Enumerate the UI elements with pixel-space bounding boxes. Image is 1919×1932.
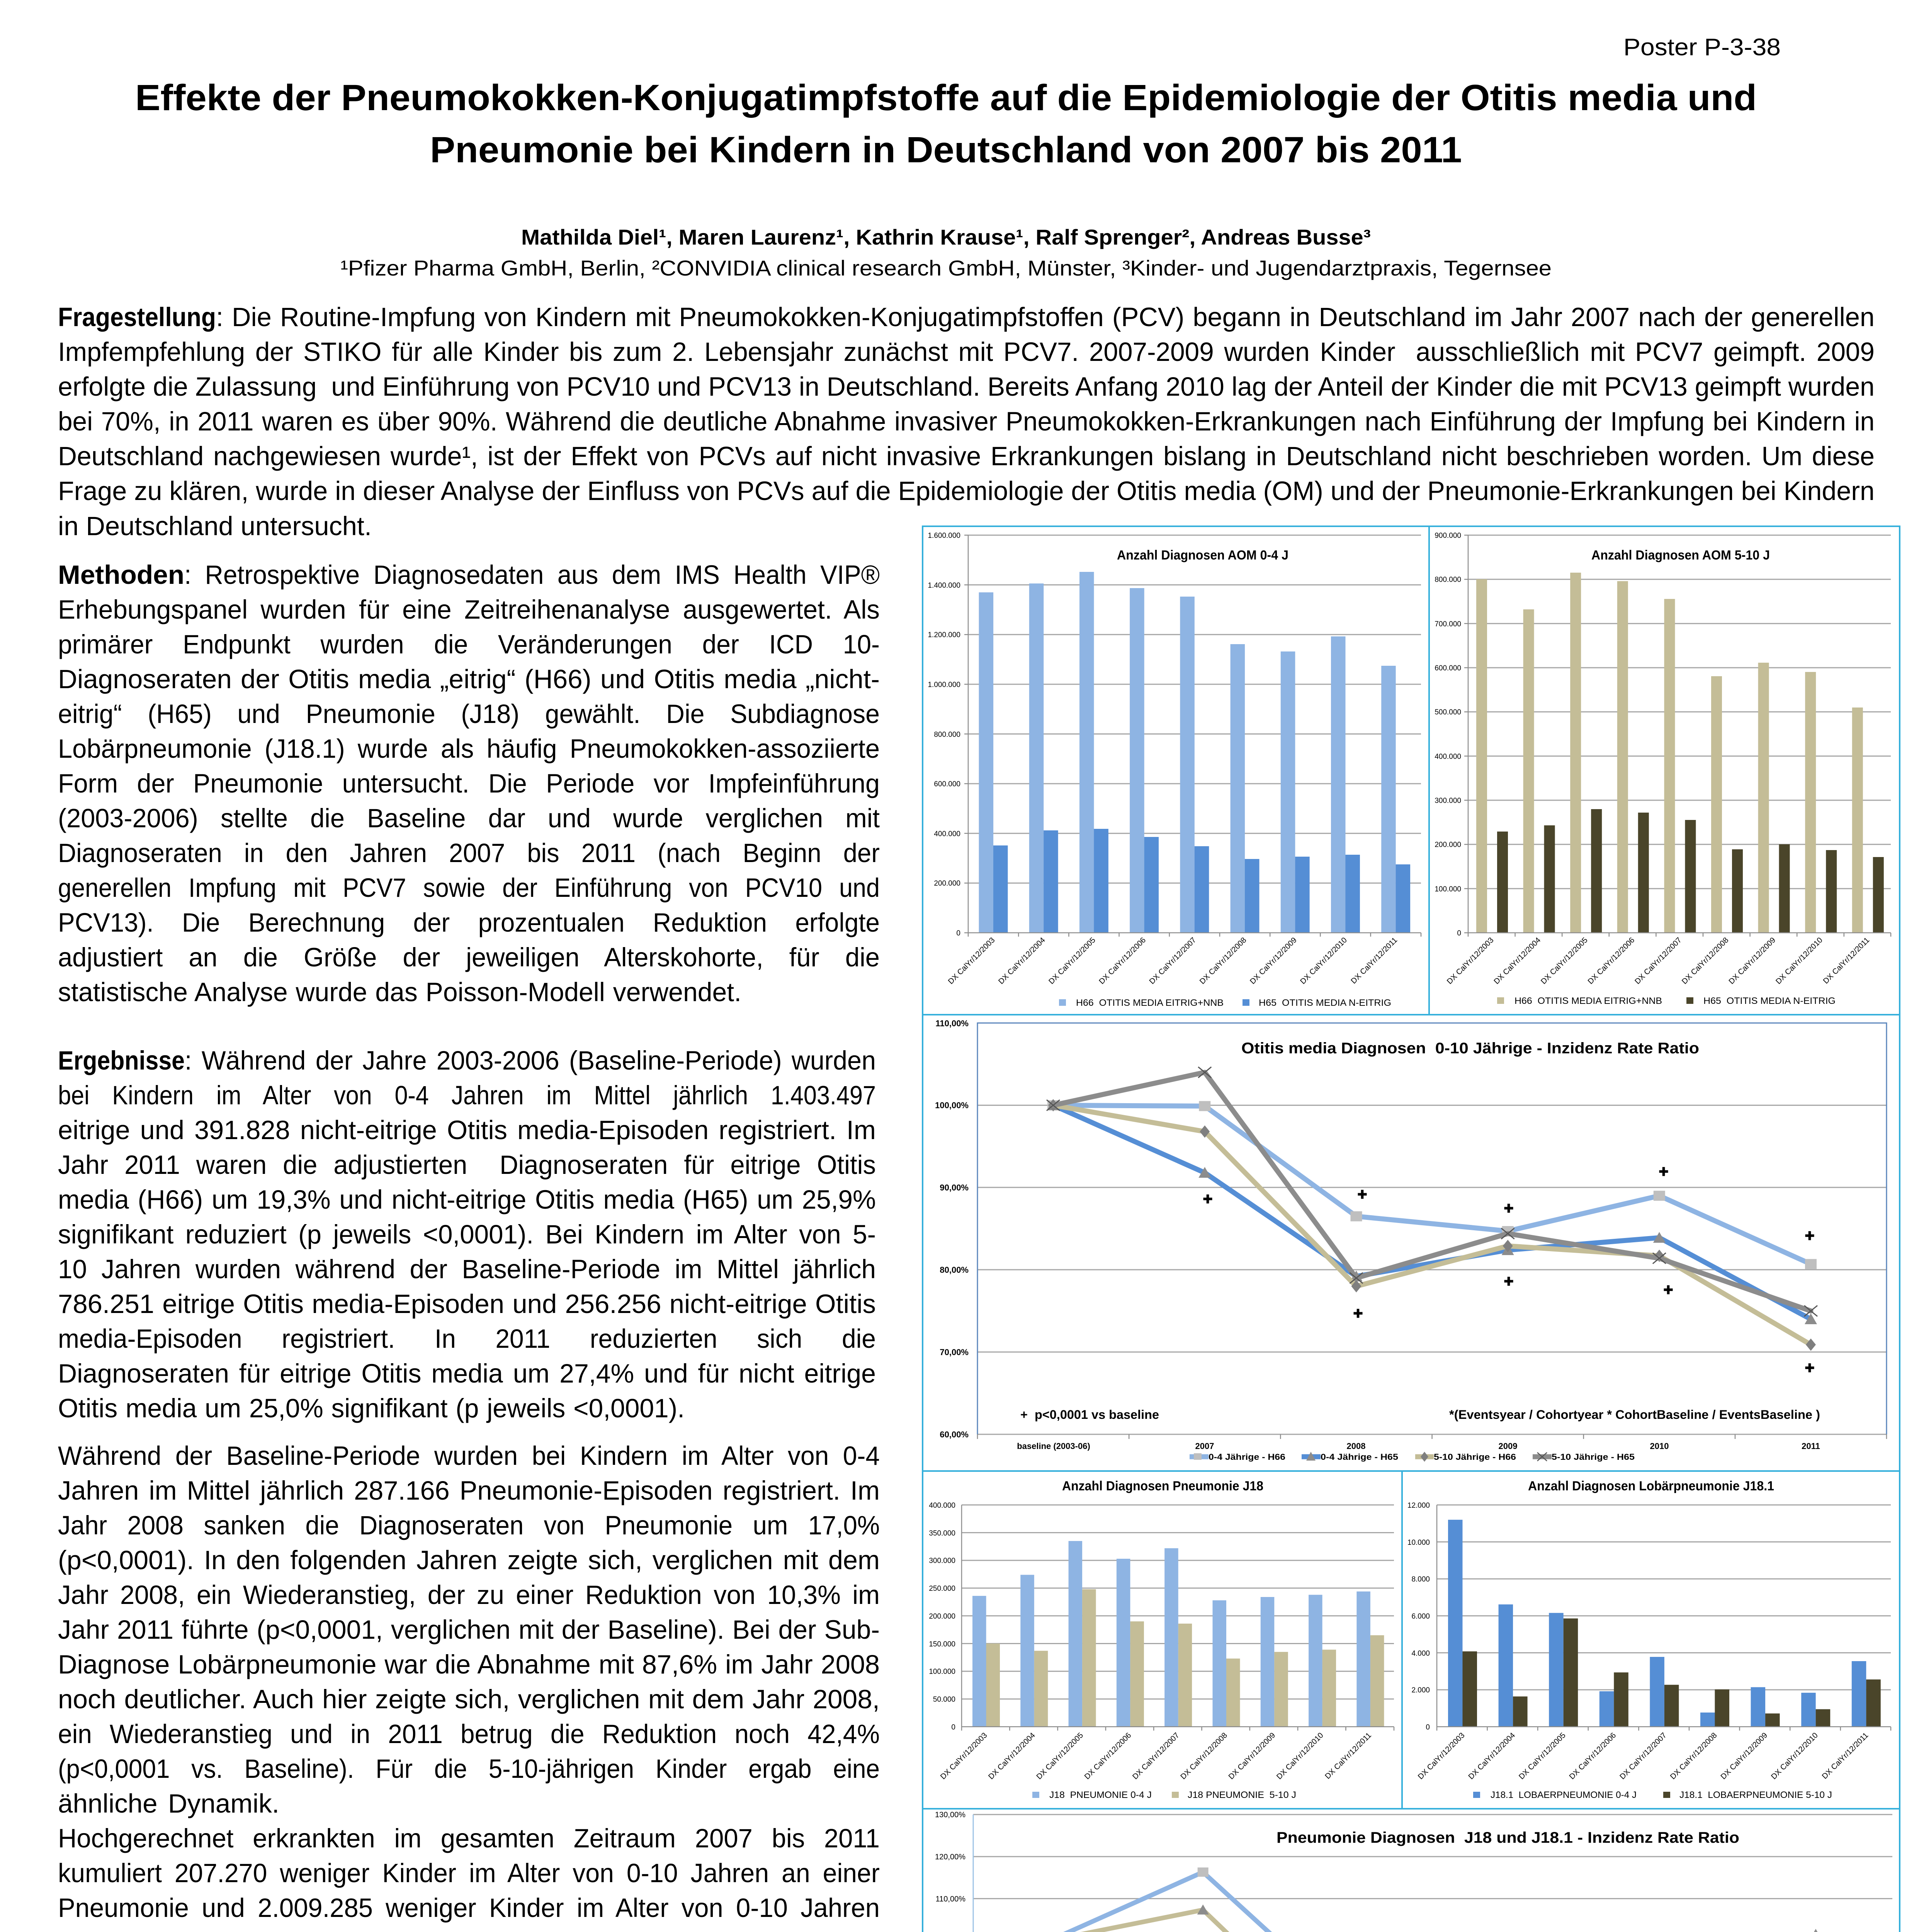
legend: J18.1 LOBAERPNEUMONIE 5-10 J <box>1679 1790 1832 1800</box>
x axis labels: DX CalYr/12/2009 <box>1227 1731 1277 1781</box>
text block: Ergebnisse Otitis media: media (H66) um 19,3% und nicht-eitrige Otitis media (H65) um 25,9% <box>58 1185 876 1214</box>
y axis labels: 110,00% <box>935 1019 969 1028</box>
x axis labels: DX CalYr/12/2007 <box>1131 1731 1181 1781</box>
x axis labels: DX CalYr/12/2008 <box>1179 1731 1229 1781</box>
x axis labels: DX CalYr/12/2008 <box>1680 936 1730 986</box>
affiliations: ¹Pfizer Pharma GmbH, Berlin, ²CONVIDIA clinical research GmbH, Münster, ³Kinder- und Jugendarztpraxis, Tegernsee <box>340 256 1552 280</box>
y axis labels: 700.000 <box>1435 620 1461 628</box>
line: 5-10 Jährige J18 <box>1050 1905 1822 1932</box>
text block: Methoden: Methoden <box>58 560 184 590</box>
y axis labels <box>1435 532 1461 937</box>
significance markers: + <box>1358 1185 1367 1203</box>
text block: Methoden: PCV13). Die Berechnung der prozentualen Reduktion erfolgte <box>58 908 880 937</box>
legend: H65 OTITIS MEDIA N-EITRIG <box>1703 996 1836 1006</box>
y axis labels: 400.000 <box>1435 753 1461 761</box>
x axis labels: baseline (2003-06) <box>1017 1441 1090 1451</box>
text block: Ergebnisse Pneumonie: Jahr 2011 führte (p<0,0001, verglichen mit der Baseline). Bei der Sub- <box>58 1615 880 1645</box>
chart title: Otitis media Diagnosen 0-10 Jährige - Inzidenz Rate Ratio <box>1241 1040 1699 1057</box>
legend <box>1497 996 1836 1006</box>
text block: Ergebnisse Pneumonie: (p<0,0001). In den folgenden Jahren zeigte sich, verglichen mit dem <box>58 1545 880 1575</box>
y axis labels: 1.400.000 <box>928 582 960 590</box>
chart title: Anzahl Diagnosen Lobärpneumonie J18.1 <box>1528 1479 1774 1493</box>
y axis labels: 1.600.000 <box>928 532 960 540</box>
text block: Ergebnisse Otitis media <box>58 1046 876 1423</box>
text block: Ergebnisse Otitis media: signifikant reduziert (p jeweils <0,0001). Bei Kindern im Alter von 5- <box>58 1219 876 1249</box>
text block: Ergebnisse Otitis media: media-Episoden registriert. In 2011 reduzierten sich die <box>58 1324 876 1354</box>
text block: Methoden: Erhebungspanel wurden für eine Zeitreihenanalyse ausgewertet. Als <box>58 595 880 624</box>
chart title: Pneumonie Diagnosen J18 und J18.1 - Inzidenz Rate Ratio <box>1277 1829 1739 1846</box>
x axis labels: DX CalYr/12/2011 <box>1323 1731 1373 1781</box>
text block: Methoden: generellen Impfung mit PCV7 sowie der Einführung von PCV10 und <box>58 873 880 903</box>
text block: Methoden: Diagnoseraten der Otitis media „eitrig“ (H66) und Otitis media „nicht- <box>58 664 880 694</box>
y axis labels <box>1407 1502 1430 1731</box>
text block: Methoden: : Retrospektive Diagnosedaten aus dem IMS Health VIP® <box>184 560 880 590</box>
panel: line chart Pneumonie <box>923 1809 1900 1932</box>
text block: Methoden: adjustiert an die Größe der jeweiligen Alterskohorte, für die <box>58 942 880 972</box>
bars H66 <box>979 572 1396 933</box>
line: 0-4 Jährige H65 <box>1047 1099 1817 1324</box>
y axis labels: 250.000 <box>929 1585 955 1593</box>
significance markers: + <box>1664 1281 1673 1299</box>
text block: Ergebnisse Pneumonie: kumuliert 207.270 weniger Kinder im Alter von 0-10 Jahren an einer <box>58 1858 880 1888</box>
text block: Ergebnisse Otitis media: Diagnoseraten für eitrige Otitis media um 27,4% und für nicht eitrige <box>58 1359 876 1388</box>
note: p value: + p<0,0001 vs baseline <box>1020 1408 1159 1422</box>
significance markers: + <box>1353 1304 1363 1322</box>
text block: Ergebnisse Otitis media: Otitis media um 25,0% signifikant (p jeweils <0,0001). <box>58 1393 685 1423</box>
line: 5-10 Jährige H65 <box>1047 1067 1817 1316</box>
chart title: Anzahl Diagnosen AOM 5-10 J <box>1591 548 1770 563</box>
text block: Fragestellung: in Deutschland untersucht. <box>58 511 372 541</box>
text block: Fragestellung: Fragestellung <box>58 302 216 332</box>
y axis labels: 60,00% <box>940 1430 969 1439</box>
line: 5-10 Jährige H66 <box>1048 1099 1816 1351</box>
x axis labels: DX CalYr/12/2010 <box>1769 1731 1820 1781</box>
x axis labels: DX CalYr/12/2004 <box>987 1731 1037 1781</box>
y axis labels: 80,00% <box>940 1265 969 1275</box>
y axis labels: 0 <box>951 1723 955 1731</box>
y axis labels: 100.000 <box>1435 885 1461 893</box>
significance markers: + <box>1805 1226 1814 1245</box>
text block: Fragestellung: : Die Routine-Impfung von Kindern mit Pneumokokken-Konjugatimpfstoffen (PCV) begann in Deutschland im Jahr 2007 nach der generellen <box>216 302 1875 332</box>
y axis labels: 110,00% <box>936 1895 965 1903</box>
y axis labels: 500.000 <box>1435 708 1461 716</box>
text block: Fragestellung: Deutschland nachgewiesen wurde¹, ist der Effekt von PCVs auf nicht invasive Erkrankungen bislang in Deutschland nicht beschrieben worden. Um diese <box>58 441 1875 471</box>
legend: H66 OTITIS MEDIA EITRIG+NNB <box>1076 998 1224 1008</box>
y axis labels: 100.000 <box>929 1668 955 1676</box>
x axis labels: DX CalYr/12/2004 <box>1492 936 1542 986</box>
text block: Ergebnisse Pneumonie: Pneumonie und 2.009.285 weniger Kinder im Alter von 0-10 Jahren <box>58 1893 880 1923</box>
text block: Methoden: statistische Analyse wurde das Poisson-Modell verwendet. <box>58 977 741 1007</box>
line: 0-4 Jährige H66 <box>1047 1100 1817 1269</box>
x axis labels: DX CalYr/12/2009 <box>1727 936 1777 986</box>
y axis labels <box>935 1019 969 1439</box>
y axis labels: 130,00% <box>935 1811 965 1819</box>
title: Pneumonie bei Kindern in Deutschland von 2007 bis 2011 <box>430 129 1462 170</box>
text block: Ergebnisse Pneumonie <box>58 1441 880 1932</box>
y axis labels: 100,00% <box>935 1100 969 1110</box>
text block: Ergebnisse Pneumonie: (p<0,0001 vs. Baseline). Für die 5-10-jährigen Kinder ergab eine <box>58 1754 880 1784</box>
legend <box>1473 1790 1832 1800</box>
text block: Ergebnisse Pneumonie: noch deutlicher. Auch hier zeigte sich, verglichen mit dem Jahr 2008, <box>58 1684 880 1714</box>
x axis labels: 2007 <box>1195 1441 1214 1451</box>
y axis labels <box>935 1811 965 1932</box>
legend: H65 OTITIS MEDIA N-EITRIG <box>1259 998 1391 1008</box>
significance markers: + <box>1203 1190 1212 1208</box>
text block: Ergebnisse Pneumonie: Jahr 2008, ein Wiederanstieg, der zu einer Reduktion von 10,3% im <box>58 1580 880 1610</box>
bars J18.1 5-10 J <box>1463 1618 1881 1727</box>
y axis labels: 200.000 <box>934 879 960 888</box>
text block: Fragestellung: Impfempfehlung der STIKO für alle Kinder bis zum 2. Lebensjahr zunächst mit PCV7. 2007-2009 wurden Kinder ausschließlich mit PCV7 geimpft. 2009 <box>58 337 1875 367</box>
significance markers: + <box>1659 1162 1668 1180</box>
y axis labels: 400.000 <box>929 1502 955 1510</box>
text block: Methoden: Form der Pneumonie untersucht. Die Periode vor Impfeinführung <box>58 769 880 798</box>
text block: Ergebnisse Otitis media: 786.251 eitrige Otitis media-Episoden und 256.256 nicht-eitrige Otitis <box>58 1289 876 1319</box>
x axis labels: DX CalYr/12/2005 <box>1539 936 1589 986</box>
text block: Methoden: primärer Endpunkt wurden die Veränderungen der ICD 10- <box>58 629 880 659</box>
legend: 0-4 Jährige - H66 <box>1209 1452 1285 1462</box>
text block: Methoden: eitrig“ (H65) und Pneumonie (J18) gewählt. Die Subdiagnose <box>58 699 880 729</box>
x axis labels: DX CalYr/12/2011 <box>1350 936 1399 985</box>
x axis labels: DX CalYr/12/2005 <box>1517 1731 1567 1781</box>
text block: Methoden: (2003-2006) stellte die Baseline dar und wurde verglichen mit <box>58 803 880 833</box>
text block: Fragestellung: bei 70%, in 2011 waren es über 90%. Während die deutliche Abnahme invasiver Pneumokokken-Erkrankungen nach Einführung der Impfung bei Kindern in <box>58 406 1875 436</box>
x axis labels: DX CalYr/12/2003 <box>1445 936 1496 986</box>
x axis labels <box>1445 936 1871 986</box>
legend: J18 PNEUMONIE 5-10 J <box>1188 1790 1296 1800</box>
legend: 5-10 Jährige - H66 <box>1434 1452 1516 1462</box>
y axis labels: 1.200.000 <box>928 631 960 639</box>
x axis labels: DX CalYr/12/2010 <box>1275 1731 1325 1781</box>
x axis labels: DX CalYr/12/2009 <box>1248 936 1299 986</box>
text block: Fragestellung: Frage zu klären, wurde in dieser Analyse der Einfluss von PCVs auf die Epidemiologie der Otitis media (OM) und der Pneumonie-Erkrankungen bei Kindern <box>58 476 1875 506</box>
text block: Ergebnisse Pneumonie: Jahren im Mittel jährlich 287.166 Pneumonie-Episoden registriert. Im <box>58 1476 880 1505</box>
poster number: Poster P-3-38 <box>1623 34 1781 61</box>
x axis labels: DX CalYr/12/2006 <box>1586 936 1636 986</box>
bars H65 <box>993 829 1410 933</box>
x axis labels: 2010 <box>1650 1441 1669 1451</box>
text block: Ergebnisse Otitis media: bei Kindern im Alter von 0-4 Jahren im Mittel jährlich 1.403.497 <box>58 1080 876 1110</box>
x axis labels: DX CalYr/12/2006 <box>1568 1731 1618 1781</box>
text block: Fragestellung <box>58 302 1875 541</box>
x axis labels: DX CalYr/12/2003 <box>1416 1731 1467 1781</box>
y axis labels: 0 <box>956 929 960 937</box>
text block: Methoden <box>58 560 880 1007</box>
x axis labels: DX CalYr/12/2005 <box>1047 936 1097 986</box>
y axis labels: 800.000 <box>1435 576 1461 584</box>
y axis labels: 900.000 <box>1435 532 1461 540</box>
y axis labels: 200.000 <box>1435 841 1461 849</box>
significance markers: + <box>1504 1272 1513 1290</box>
legend <box>1190 1452 1635 1462</box>
y axis labels: 400.000 <box>934 830 960 838</box>
significance markers: + <box>1805 1359 1814 1377</box>
y axis labels: 1.000.000 <box>928 681 960 689</box>
text block: Ergebnisse Pneumonie: ein Wiederanstieg und in 2011 betrug die Reduktion noch 42,4% <box>58 1719 880 1749</box>
x axis labels: DX CalYr/12/2007 <box>1148 936 1198 986</box>
y axis labels: 50.000 <box>933 1696 955 1704</box>
bars H66 <box>1476 573 1863 933</box>
y axis labels: 10.000 <box>1407 1539 1430 1547</box>
y axis labels: 90,00% <box>940 1183 969 1192</box>
x axis labels: DX CalYr/12/2008 <box>1669 1731 1719 1781</box>
panel: line chart Otitis media <box>923 1015 1900 1471</box>
text block: Ergebnisse Otitis media: Ergebnisse <box>58 1046 185 1075</box>
bars J18.1 0-4 J <box>1448 1520 1866 1727</box>
panel: bar chart Lobärpneumonie J18.1 <box>1402 1471 1900 1809</box>
x axis labels: DX CalYr/12/2004 <box>1467 1731 1517 1781</box>
legend: 5-10 Jährige - H65 <box>1552 1452 1635 1462</box>
y axis labels: 4.000 <box>1411 1650 1430 1658</box>
chart title: Anzahl Diagnosen AOM 0-4 J <box>1117 548 1288 563</box>
bars J18 5-10 J <box>986 1589 1384 1727</box>
panel: bar chart AOM 0-4 J <box>923 526 1429 1015</box>
text block: Ergebnisse Pneumonie: Hochgerechnet erkrankten im gesamten Zeitraum 2007 bis 2011 <box>58 1823 880 1853</box>
y axis labels: 200.000 <box>929 1612 955 1621</box>
x axis labels: DX CalYr/12/2003 <box>947 936 997 986</box>
legend <box>1059 998 1391 1008</box>
y axis labels: 70,00% <box>940 1347 969 1357</box>
text block: Methoden: Diagnoseraten in den Jahren 2007 bis 2011 (nach Beginn der <box>58 838 880 868</box>
title <box>135 77 1757 170</box>
x axis labels: DX CalYr/12/2009 <box>1719 1731 1769 1781</box>
x axis labels: 2008 <box>1347 1441 1365 1451</box>
bars H65 <box>1497 809 1884 933</box>
x axis labels: DX CalYr/12/2010 <box>1299 936 1349 986</box>
y axis labels: 120,00% <box>935 1853 965 1861</box>
x axis labels: DX CalYr/12/2003 <box>939 1731 989 1781</box>
x axis labels: DX CalYr/12/2006 <box>1098 936 1147 986</box>
panel: bar chart Pneumonie J18 <box>923 1471 1402 1809</box>
significance markers <box>1203 1162 1814 1377</box>
panel: bar chart AOM 5-10 J <box>1429 526 1900 1015</box>
x axis labels: 2011 <box>1802 1441 1820 1451</box>
y axis labels: 800.000 <box>934 731 960 739</box>
x axis labels: DX CalYr/12/2010 <box>1774 936 1824 986</box>
chart title: Anzahl Diagnosen Pneumonie J18 <box>1062 1479 1263 1493</box>
legend: H66 OTITIS MEDIA EITRIG+NNB <box>1514 996 1662 1006</box>
text block: Ergebnisse Otitis media: Jahr 2011 waren die adjustierten Diagnoseraten für eitrige Otitis <box>58 1150 876 1180</box>
x axis labels: DX CalYr/12/2008 <box>1198 936 1248 986</box>
legend: J18.1 LOBAERPNEUMONIE 0-4 J <box>1491 1790 1637 1800</box>
x axis labels <box>947 936 1399 986</box>
x axis labels: DX CalYr/12/2011 <box>1820 1731 1870 1781</box>
x axis labels <box>939 1731 1373 1781</box>
text block: Methoden: Lobärpneumonie (J18.1) wurde als häufig Pneumokokken-assoziierte <box>58 734 880 764</box>
x axis labels: DX CalYr/12/2006 <box>1083 1731 1133 1781</box>
x axis labels <box>1017 1441 1820 1451</box>
text block: Ergebnisse Pneumonie: Diagnose Lobärpneumonie war die Abnahme mit 87,6% im Jahr 2008 <box>58 1650 880 1679</box>
line: 0-4 Jährige J18 <box>1050 1867 1821 1932</box>
y axis labels: 8.000 <box>1411 1575 1430 1583</box>
y axis labels <box>929 1502 955 1731</box>
y axis labels <box>928 532 960 937</box>
x axis labels <box>1416 1731 1870 1781</box>
text block: Ergebnisse Pneumonie: Während der Baseline-Periode wurden bei Kindern im Alter von 0-4 <box>58 1441 880 1471</box>
legend: J18 PNEUMONIE 0-4 J <box>1049 1790 1152 1800</box>
bars J18 0-4 J <box>972 1541 1370 1727</box>
y axis labels: 600.000 <box>1435 664 1461 672</box>
y axis labels: 2.000 <box>1411 1686 1430 1694</box>
text block: Ergebnisse Otitis media: eitrige und 391.828 nicht-eitrige Otitis media-Episoden registriert. Im <box>58 1115 876 1145</box>
x axis labels: DX CalYr/12/2005 <box>1035 1731 1085 1781</box>
text block: Fragestellung: erfolgte die Zulassung und Einführung von PCV10 und PCV13 in Deutschland. Bereits Anfang 2010 lag der Anteil der Kinder die mit PCV13 geimpft wurden <box>58 372 1875 401</box>
y axis labels: 300.000 <box>929 1557 955 1565</box>
x axis labels: DX CalYr/12/2004 <box>997 936 1047 986</box>
legend: 0-4 Jährige - H65 <box>1321 1452 1398 1462</box>
y axis labels: 350.000 <box>929 1529 955 1537</box>
y axis labels: 600.000 <box>934 780 960 788</box>
title: Effekte der Pneumokokken-Konjugatimpfstoffe auf die Epidemiologie der Otitis media und <box>135 77 1757 118</box>
text block: Ergebnisse Pneumonie: ähnliche Dynamik. <box>58 1789 279 1818</box>
y axis labels: 0 <box>1457 929 1461 937</box>
significance markers: + <box>1504 1199 1513 1217</box>
x axis labels: 2009 <box>1499 1441 1517 1451</box>
x axis labels: DX CalYr/12/2007 <box>1633 936 1683 986</box>
note: formula: *(Eventsyear / Cohortyear * CohortBaseline / EventsBaseline ) <box>1449 1408 1820 1422</box>
y axis labels: 12.000 <box>1407 1502 1430 1510</box>
legend <box>1032 1790 1296 1800</box>
y axis labels: 300.000 <box>1435 797 1461 805</box>
text block: Ergebnisse Pneumonie: Jahr 2008 sanken die Diagnoseraten von Pneumonie um 17,0% <box>58 1510 880 1540</box>
text block: Ergebnisse Otitis media: 10 Jahren wurden während der Baseline-Periode im Mittel jährlich <box>58 1254 876 1284</box>
y axis labels: 150.000 <box>929 1640 955 1648</box>
y axis labels: 0 <box>1426 1723 1430 1731</box>
x axis labels: DX CalYr/12/2011 <box>1822 936 1871 985</box>
x axis labels: DX CalYr/12/2007 <box>1618 1731 1668 1781</box>
y axis labels: 6.000 <box>1411 1612 1430 1621</box>
text block: Ergebnisse Otitis media: : Während der Jahre 2003-2006 (Baseline-Periode) wurden <box>185 1046 876 1075</box>
authors: Mathilda Diel¹, Maren Laurenz¹, Kathrin Krause¹, Ralf Sprenger², Andreas Busse³ <box>521 225 1371 249</box>
